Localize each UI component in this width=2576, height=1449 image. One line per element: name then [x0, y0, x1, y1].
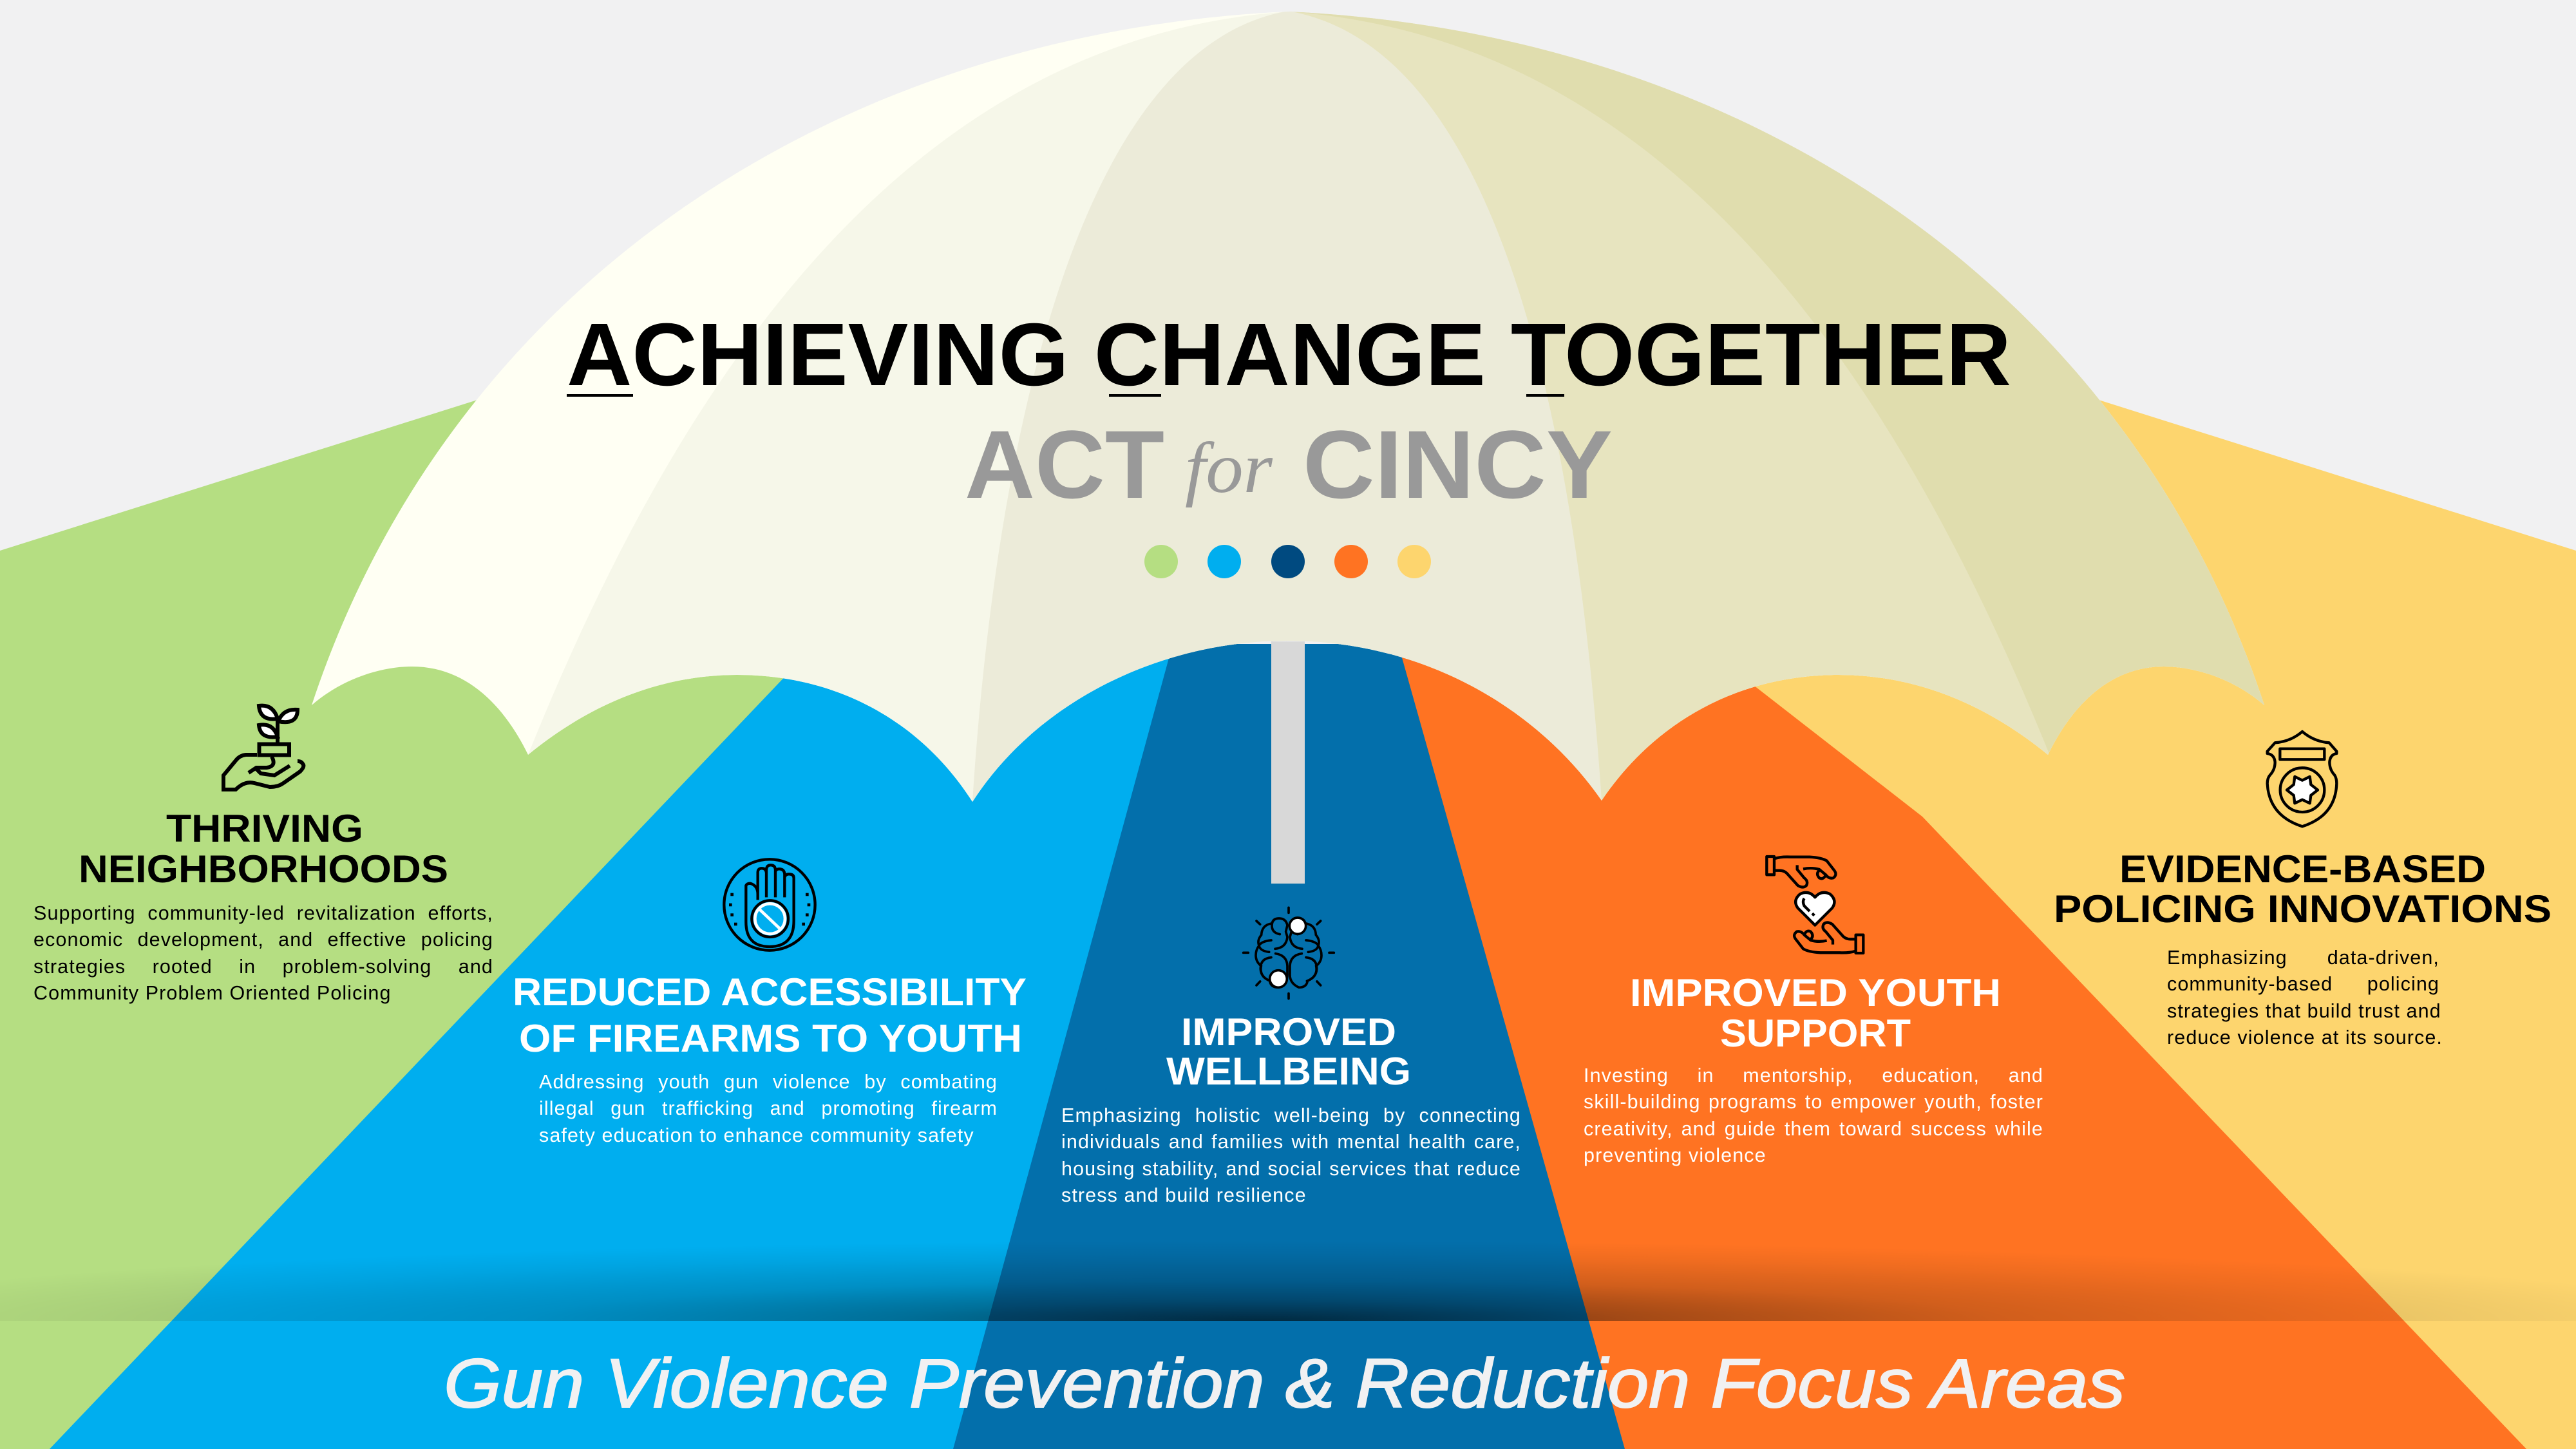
area: orange youth support [1391, 644, 2526, 1449]
body text: Community Problem Oriented Policing [33, 982, 392, 1004]
body text [1584, 1065, 2043, 1166]
body text: community-based policing [2167, 973, 2439, 995]
area: green thriving neighborhoods [0, 396, 902, 1449]
shadow above the banner [0, 1224, 2576, 1321]
panel: improved youth support [1584, 855, 2043, 1166]
title text: ACHIEVING CHANGE TOGETHER [567, 305, 2011, 404]
icon: police badge [2268, 732, 2336, 826]
heading [1630, 971, 2001, 1055]
body text: Emphasizing holistic well-being by connecting [1061, 1104, 1521, 1126]
colour dots [1144, 545, 1431, 578]
icon: stop hand in circle [724, 859, 815, 951]
heading [1166, 1010, 1411, 1093]
body text: preventing violence [1584, 1144, 1766, 1166]
body text: illegal gun trafficking and promoting firearm [539, 1097, 998, 1119]
panel: evidence-based policing innovations [2054, 730, 2552, 1048]
heading: IMPROVED [1181, 1010, 1396, 1054]
umbrella canopy [312, 12, 2264, 802]
heading: SUPPORT [1720, 1012, 1911, 1055]
heading: NEIGHBORHOODS [79, 848, 448, 891]
heading [2054, 848, 2552, 931]
area: dark blue wellbeing [953, 644, 1625, 1449]
body text: safety education to enhance community safety [539, 1124, 974, 1146]
title underlines [567, 394, 1564, 397]
body text: housing stability, and social services that reduce [1061, 1158, 1521, 1180]
body text: strategies that build trust and [2167, 1000, 2441, 1022]
icon: hands and heart [1766, 857, 1863, 953]
body text: Addressing youth gun violence by combating [539, 1071, 998, 1093]
body text: individuals and families with mental health care, [1061, 1131, 1521, 1153]
body text [539, 1071, 998, 1146]
logo: ACT for CINCY: CINCY [1303, 410, 1613, 518]
body text: strategies rooted in problem-solving and [33, 956, 493, 978]
umbrella handle [1271, 641, 1305, 884]
icon: brain [1244, 907, 1334, 999]
heading [79, 807, 448, 891]
body text: reduce violence at its source. [2167, 1027, 2443, 1048]
panel: reduced accessibility of firearms [513, 858, 1027, 1146]
icon: hand holding seedling [223, 706, 303, 790]
heading [513, 971, 1027, 1060]
area: blue firearms access [50, 644, 1179, 1449]
body text: Supporting community-led revitalization efforts, [33, 902, 493, 924]
area: yellow policing innovations [1674, 396, 2576, 1449]
panel: thriving neighborhoods [33, 703, 493, 1004]
body text: skill-building programs to empower youth, foster [1584, 1091, 2043, 1113]
title block [567, 305, 2011, 404]
heading: POLICING INNOVATIONS [2054, 887, 2552, 931]
logo: ACT for CINCY [965, 410, 1613, 518]
body text: economic development, and effective policing [33, 929, 493, 951]
body text: creativity, and guide them toward success while [1584, 1118, 2043, 1140]
heading: OF FIREARMS TO YOUTH [519, 1017, 1022, 1060]
body text: stress and build resilience [1061, 1184, 1307, 1206]
heading: REDUCED ACCESSIBILITY [513, 971, 1027, 1014]
body text: Emphasizing data-driven, [2167, 947, 2439, 969]
heading: WELLBEING [1166, 1050, 1411, 1093]
body text [33, 902, 493, 1004]
panel: improved wellbeing [1061, 907, 1521, 1206]
logo: ACT for CINCY: ACT [965, 410, 1164, 518]
body text [2167, 947, 2443, 1048]
body text: Investing in mentorship, education, and [1584, 1065, 2043, 1086]
body text [1061, 1104, 1521, 1206]
heading: THRIVING [166, 807, 363, 850]
heading: EVIDENCE-BASED [2119, 848, 2486, 891]
heading: IMPROVED YOUTH [1630, 971, 2001, 1014]
logo: ACT for CINCY: for [1185, 428, 1273, 508]
